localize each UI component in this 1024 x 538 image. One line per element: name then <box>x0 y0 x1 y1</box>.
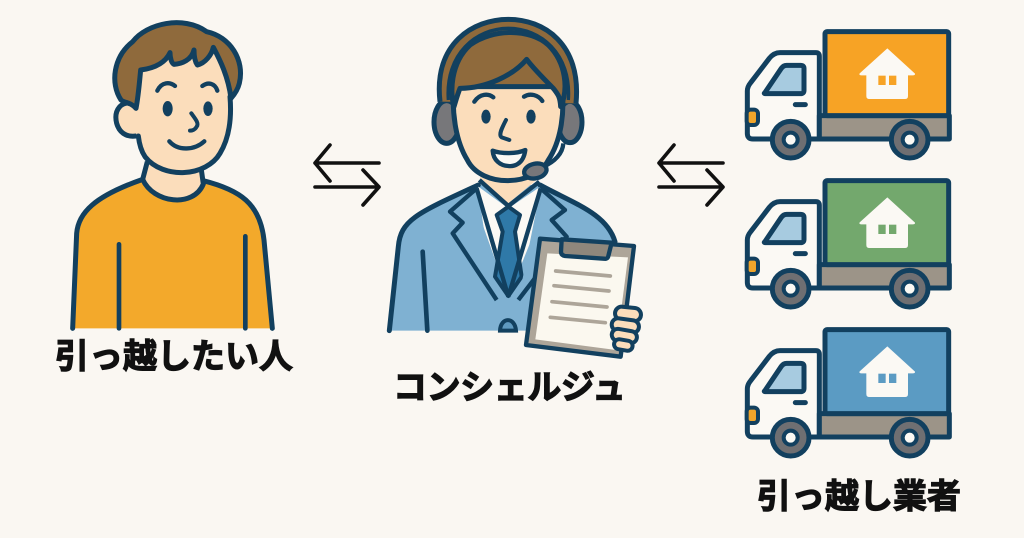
person: customer who wants to move <box>73 23 272 328</box>
hair <box>115 23 241 108</box>
arrows between concierge and movers <box>659 145 723 205</box>
clipboard <box>526 239 634 357</box>
headset band <box>439 19 577 103</box>
shirt <box>478 187 539 297</box>
sweater <box>73 179 272 328</box>
face <box>135 50 231 173</box>
truck: blue <box>747 330 949 456</box>
neck <box>480 167 538 203</box>
suit <box>389 185 620 331</box>
lapels <box>450 188 508 300</box>
truck: orange <box>747 32 949 158</box>
label: person wanting to move: 引っ越したい人 <box>55 338 293 376</box>
facial features <box>157 83 217 91</box>
concierge with headset and clipboard <box>389 19 642 357</box>
neck <box>143 160 203 201</box>
label: concierge: コンシェルジュ <box>393 369 626 407</box>
tie <box>495 207 522 296</box>
arrows between customer and concierge <box>315 145 379 205</box>
hair <box>452 32 565 107</box>
hand <box>611 306 642 352</box>
face <box>453 87 563 181</box>
ear <box>116 103 147 136</box>
microphone <box>543 143 563 167</box>
ear cups <box>434 101 459 143</box>
truck: green <box>747 181 949 307</box>
button <box>500 320 516 331</box>
facial features <box>474 95 542 102</box>
label: moving companies: 引っ越し業者 <box>757 478 961 516</box>
